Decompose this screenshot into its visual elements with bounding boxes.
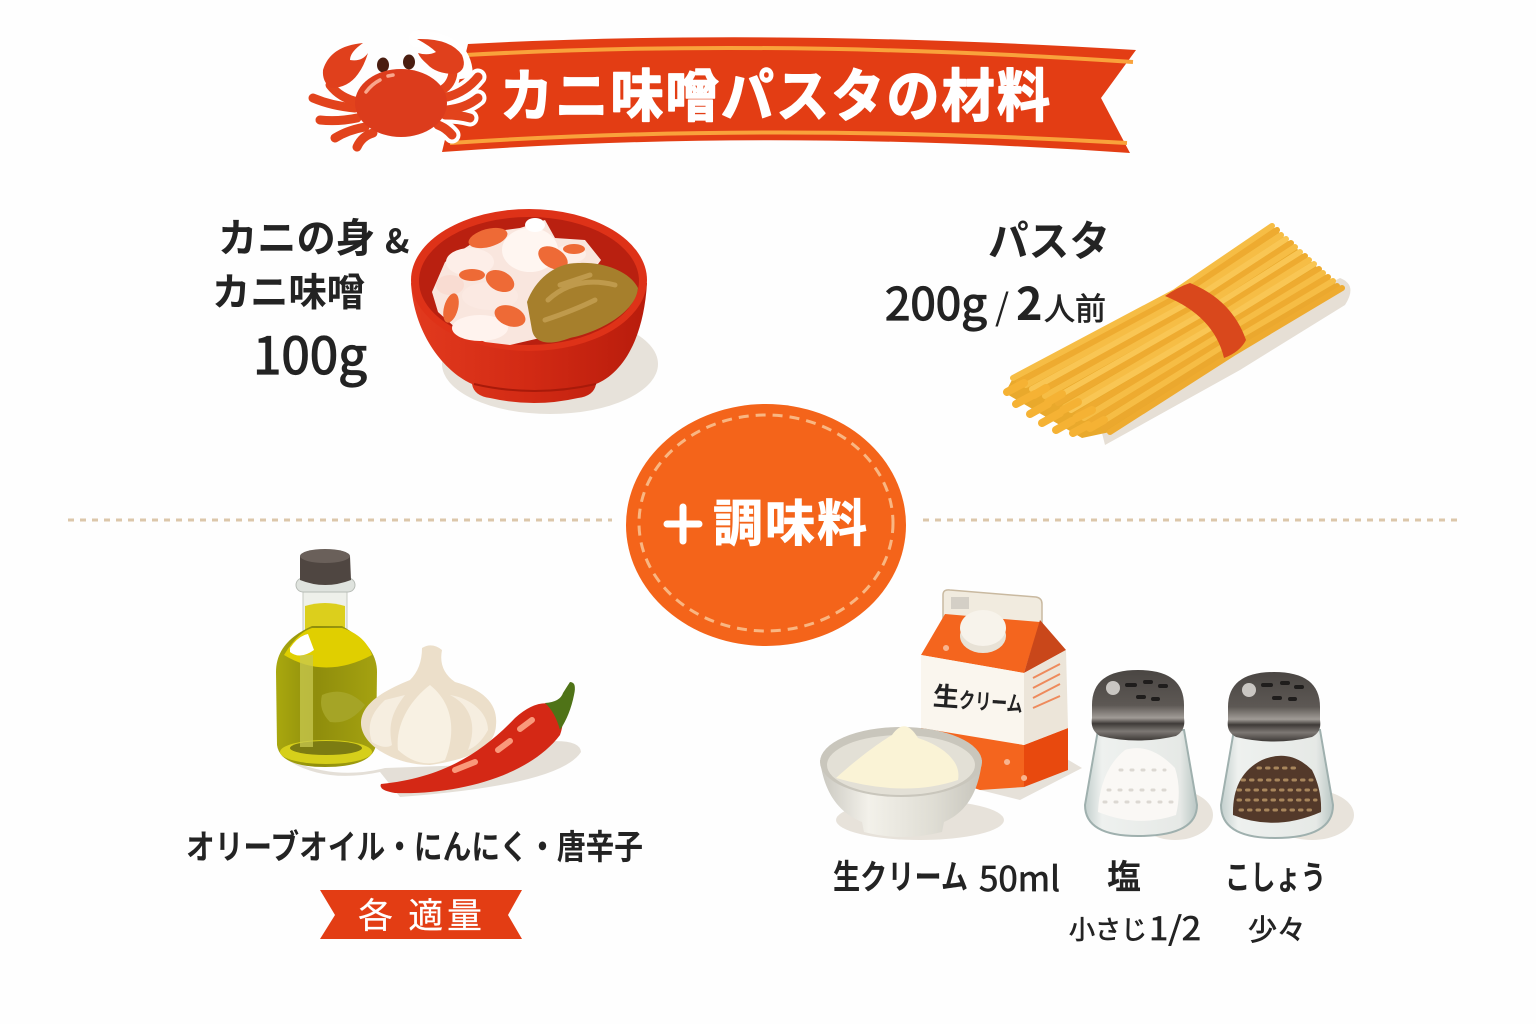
title text: カニ味噌パスタの材料	[500, 50, 1050, 133]
icon: bowl of crab meat and miso	[411, 209, 658, 414]
salt shadow	[1137, 790, 1213, 840]
tag text: 各 適量	[358, 888, 482, 939]
crab sticker outline	[417, 39, 478, 135]
icon: salt shaker	[1085, 670, 1213, 840]
title banner	[442, 37, 1136, 153]
icon: olive oil bottle, garlic and chili	[276, 549, 581, 797]
text: olive oil, garlic, chili: オリーブオイル・にんにく・唐辛子	[186, 820, 643, 869]
divider left	[68, 518, 612, 522]
carton shadow	[980, 755, 1082, 800]
salt cap	[1092, 670, 1184, 740]
pasta base	[1005, 226, 1342, 438]
salt glass	[1085, 730, 1197, 836]
pepper label: こしょう	[1225, 851, 1326, 899]
bottle body	[276, 626, 377, 767]
crab miso	[527, 263, 638, 343]
label: crab miso: カニ味噌	[212, 262, 365, 318]
pepper shadow	[1270, 790, 1354, 840]
pasta band	[1165, 283, 1246, 358]
bottle neck	[303, 586, 347, 636]
label: ampersand: &	[385, 215, 409, 263]
amount: 2 servings: 2	[1016, 268, 1043, 333]
amount: 100g: 100g	[253, 315, 367, 389]
badge: plus seasonings	[626, 404, 906, 646]
bottle lip	[296, 578, 355, 592]
tag ribbon	[320, 890, 522, 939]
carton roof	[921, 614, 1040, 673]
carton text katakana: クリーム	[958, 683, 1024, 719]
bottle cap	[300, 550, 351, 585]
ribbon	[442, 37, 1136, 153]
text: crab meat and miso	[212, 206, 409, 389]
shadow	[280, 741, 581, 797]
bottle leaf	[321, 692, 365, 722]
pasta strands	[1013, 226, 1342, 432]
pepper	[1233, 756, 1321, 823]
cream amount: 50ml	[979, 852, 1060, 901]
tag: appropriate amount of each	[320, 888, 522, 939]
cream	[836, 726, 958, 789]
badge stitching	[639, 415, 893, 631]
garlic	[361, 645, 496, 765]
crab eyes	[377, 58, 389, 72]
text: pasta	[885, 208, 1110, 333]
icon: pepper shaker	[1221, 672, 1354, 840]
icon: crab	[313, 39, 478, 147]
salt	[1098, 748, 1179, 821]
carton dots	[946, 648, 1024, 778]
carton label	[921, 655, 1024, 745]
rice	[432, 218, 601, 345]
label: crab meat: カニの身	[218, 206, 375, 264]
salt label: 塩	[1107, 850, 1141, 899]
carton flap	[943, 590, 1042, 630]
cream label: 生クリーム	[833, 850, 968, 899]
text: salt amount	[1069, 850, 1201, 950]
chili highlights	[455, 720, 532, 770]
pepper quantity: 少々	[1248, 907, 1306, 949]
bowl body	[411, 283, 647, 403]
icon: pasta bundle	[1005, 226, 1350, 445]
crab body	[355, 69, 447, 137]
icon: cream carton and bowl	[820, 590, 1082, 840]
chili	[381, 703, 563, 793]
pepper cap	[1228, 672, 1320, 742]
text: pepper amount	[1225, 851, 1326, 949]
cream bowl	[820, 760, 982, 837]
badge text: 調味料	[713, 484, 867, 556]
bottle highlight	[290, 634, 314, 656]
text: cream amount	[833, 850, 1060, 901]
badge plus	[667, 507, 699, 541]
bowl rim	[411, 209, 647, 351]
carton cap	[960, 619, 1006, 653]
amount: 200g: 200g	[885, 268, 987, 333]
crab legs	[313, 72, 478, 147]
crab claws	[323, 43, 368, 88]
salt number amount: 1/2	[1149, 904, 1201, 950]
badge circle	[626, 404, 906, 646]
carton lines	[1033, 664, 1060, 708]
servings label: 人前	[1044, 284, 1106, 329]
divider right	[923, 518, 1462, 522]
crab meat chunks	[440, 224, 585, 331]
pasta shadow	[1100, 278, 1350, 445]
pasta cut ends	[1007, 383, 1104, 433]
pepper glass	[1221, 730, 1333, 838]
carton text	[932, 676, 1024, 719]
carton lower panels	[921, 725, 1024, 790]
label: pasta: パスタ	[988, 208, 1110, 269]
bowl shadow	[836, 800, 1004, 840]
carton text kanji: 生	[932, 676, 961, 715]
salt kana amount: 小さじ	[1069, 910, 1147, 947]
ribbon stripes	[450, 48, 1133, 143]
bowl shadow	[442, 314, 658, 414]
slash: /	[995, 279, 1009, 331]
